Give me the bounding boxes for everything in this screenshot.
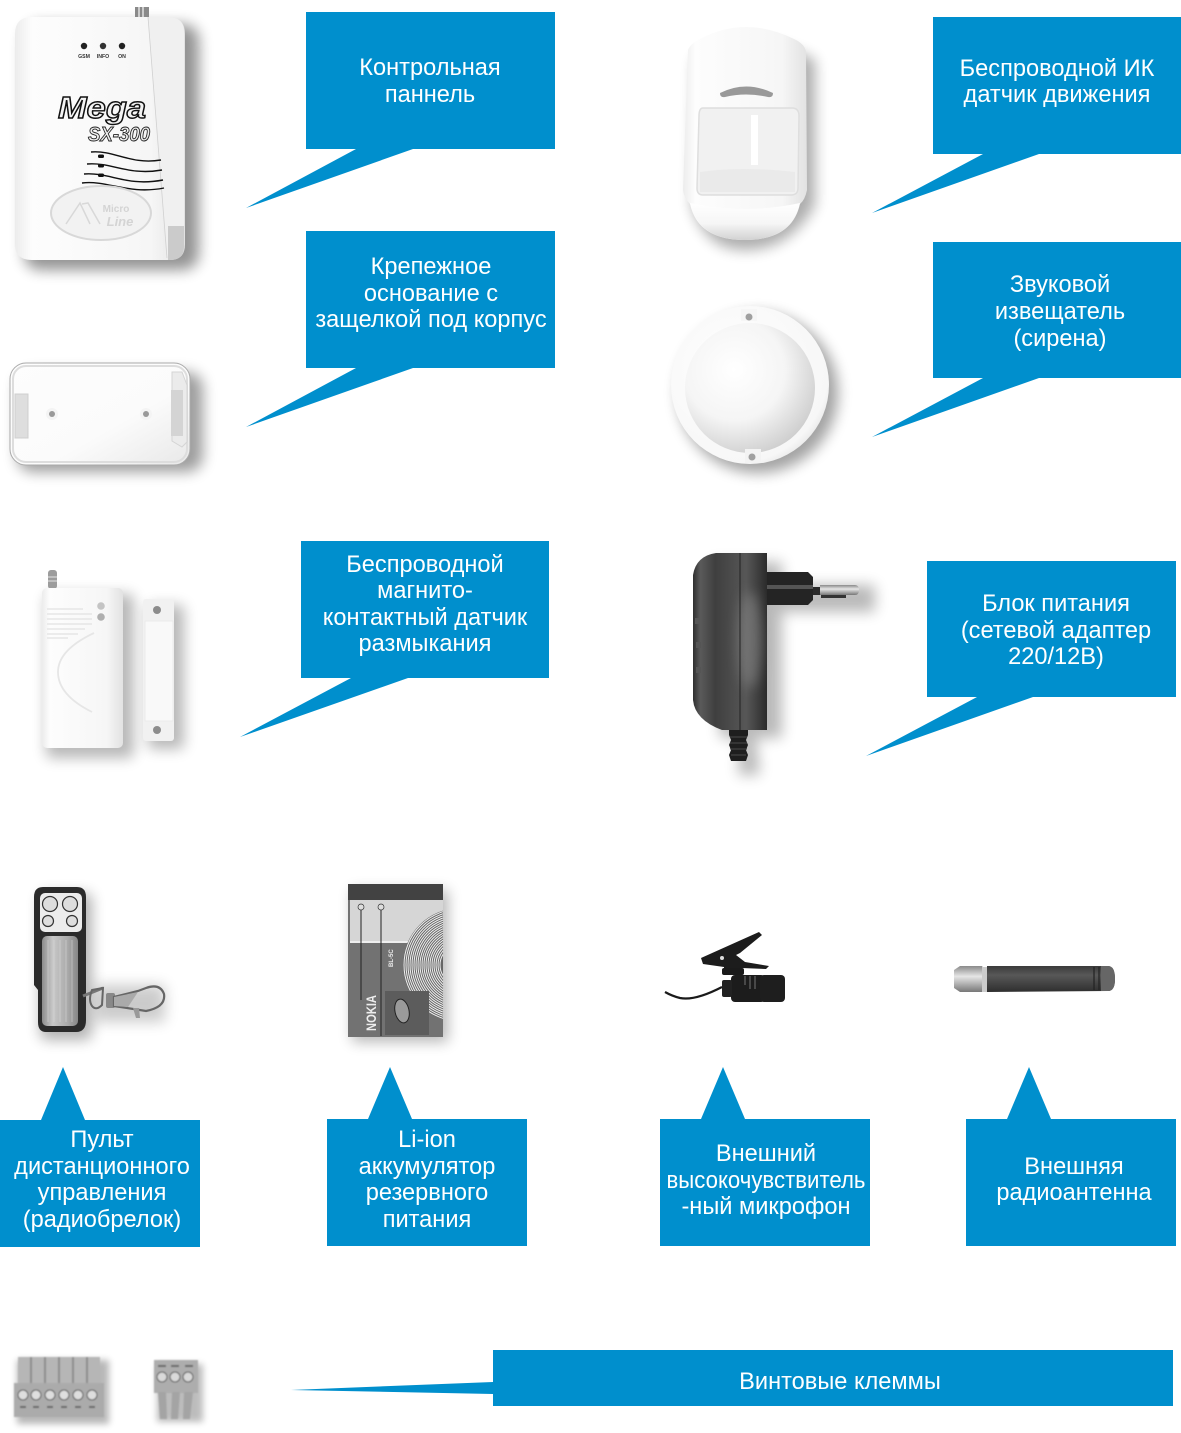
callout: power adapter: [866, 561, 1176, 756]
icon: Li-ion battery: [344, 882, 456, 1050]
callout: external antenna: радиоантенна: [996, 1180, 1153, 1206]
callout: Li-ion battery: Li-ion: [398, 1127, 456, 1153]
callout: external microphone: высокочувствитель: [666, 1168, 866, 1194]
callout: Li-ion battery: аккумулятор: [359, 1154, 495, 1180]
icon: six-way screw terminal: [14, 1357, 109, 1424]
icon: control panel Mega SX-300: ON: [118, 54, 126, 60]
callout: siren: извещатель: [995, 299, 1125, 325]
callout: control panel: Контрольная: [359, 55, 501, 81]
icon: control panel Mega SX-300: Micro: [103, 204, 129, 215]
callout: mounting base: защелкой под корпус: [315, 307, 547, 333]
icon: siren: [671, 306, 838, 473]
icon: control panel Mega SX-300: [15, 7, 199, 270]
callout: Li-ion battery: питания: [383, 1207, 471, 1233]
icon: power adapter: [693, 553, 875, 775]
callout: external antenna: Внешняя: [1024, 1154, 1124, 1180]
icon: control panel Mega SX-300: Line: [107, 214, 133, 229]
callout: remote key fob: управления: [38, 1180, 166, 1206]
icon: magnetic contact sensor: [42, 570, 184, 758]
callout: mounting base: основание с: [364, 281, 498, 307]
icon: external microphone: [665, 932, 785, 1002]
callout: mounting base: Крепежное: [371, 254, 491, 280]
callout: power adapter: 220/12В): [1008, 644, 1104, 670]
callout: magnetic contact sensor: [240, 541, 549, 737]
callout: external microphone: Внешний: [716, 1141, 816, 1167]
callout: wireless PIR motion sensor: [872, 17, 1181, 213]
icon: wireless PIR motion sensor: [683, 27, 815, 250]
callout: siren: Звуковой: [1010, 272, 1110, 298]
callout: power adapter: Блок питания: [982, 591, 1130, 617]
callout: magnetic contact sensor: Беспроводной: [346, 552, 504, 578]
icon: mounting base: [10, 363, 203, 472]
callout: control panel: [246, 12, 555, 208]
callout: power adapter: (сетевой адаптер: [961, 618, 1151, 644]
icon: control panel Mega SX-300: SX-300: [88, 124, 150, 146]
callout: magnetic contact sensor: контактный датчик: [323, 605, 528, 631]
callout: remote key fob: дистанционного: [14, 1154, 190, 1180]
icon: control panel Mega SX-300: Mega: [58, 90, 146, 125]
callout: external microphone: -ный микрофон: [681, 1194, 851, 1220]
callout: siren: (сирена): [1013, 326, 1107, 352]
icon: Li-ion battery: NOKIA: [363, 995, 379, 1031]
callout: Li-ion battery: резервного: [366, 1180, 488, 1206]
callout: external antenna: [966, 1067, 1176, 1246]
icon: external antenna: [954, 966, 1115, 992]
callout: wireless PIR motion sensor: датчик движения: [964, 82, 1150, 108]
icon: control panel Mega SX-300: GSM: [78, 54, 90, 60]
icon: remote key fob: [34, 887, 165, 1040]
callout: wireless PIR motion sensor: Беспроводной ИК: [960, 56, 1155, 82]
icon: control panel Mega SX-300: INFO: [97, 54, 109, 60]
callout: siren: [872, 242, 1181, 437]
callout: remote key fob: (радиобрелок): [23, 1207, 181, 1233]
callout: external microphone: [660, 1067, 870, 1246]
callout: mounting base: [246, 231, 555, 427]
callout: magnetic contact sensor: магнито-: [377, 578, 473, 604]
callout: screw terminals: [291, 1350, 1173, 1406]
icon: three-way screw terminal: [154, 1360, 203, 1422]
callout: screw terminals: Винтовые клеммы: [739, 1369, 941, 1395]
icon: Li-ion battery: BL-5C: [389, 949, 395, 967]
callout: remote key fob: Пульт: [70, 1127, 134, 1153]
callout: magnetic contact sensor: размыкания: [359, 631, 491, 657]
callout: remote key fob: [0, 1067, 200, 1247]
callout: Li-ion battery: [327, 1067, 527, 1246]
callout: control panel: паннель: [385, 82, 475, 108]
